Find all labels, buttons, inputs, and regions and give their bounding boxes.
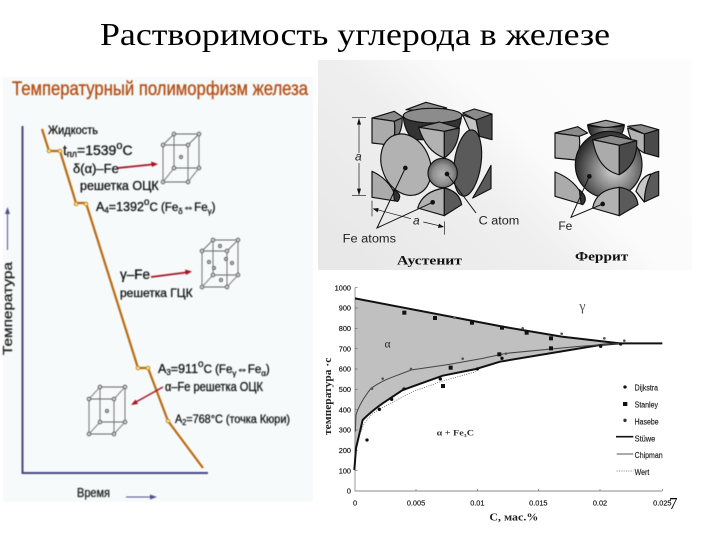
legend [616, 384, 663, 477]
region label: alpha + Fe3C: α + Fe₃C [437, 429, 474, 438]
x axis numbers: 0.02 [593, 498, 607, 507]
curve: Wert [361, 372, 476, 432]
curve labels: ⇔Fe [183, 202, 208, 214]
curve labels: C (Fe [149, 202, 178, 214]
austenite caption: Аустенит [397, 253, 463, 268]
legend: Chipman [635, 451, 663, 460]
legend: Hasebe [635, 417, 659, 426]
curve labels: o [116, 140, 122, 152]
time arrow [126, 494, 157, 500]
y axis numbers: 700 [339, 344, 351, 353]
alpha region [354, 298, 620, 470]
y axis numbers: 1000 [335, 283, 351, 292]
markers: Hasebe [371, 316, 626, 390]
title: Растворимость углерода в железе [100, 16, 610, 52]
curve labels: γ [232, 369, 236, 378]
markers: Stanley [402, 311, 553, 388]
panel: crystal lattices [318, 60, 692, 270]
lattice labels: Fe atoms [343, 231, 396, 245]
curve labels: α–Fe решетка ОЦК [165, 380, 264, 394]
curve labels: C (Fe [204, 364, 232, 376]
curve labels: ⇔Fe [236, 364, 261, 376]
curve labels: A [158, 362, 166, 376]
page number: 7 [669, 494, 678, 513]
legend: Wert [635, 468, 650, 477]
curve labels: α [261, 369, 266, 378]
red arrows [118, 162, 192, 405]
legend: Dijkstra [635, 384, 658, 393]
lattice labels: a [413, 214, 420, 228]
curve labels: =1392 [109, 200, 144, 214]
y axis numbers: 600 [339, 365, 351, 374]
lattice labels: a [355, 150, 362, 164]
y axis numbers: 400 [339, 405, 351, 414]
x axis numbers: 0.025 [653, 498, 672, 507]
markers: Dijkstra [365, 342, 622, 442]
legend: Stüwe [635, 434, 656, 443]
y axis numbers [335, 283, 351, 496]
curve labels: 2 [182, 418, 187, 427]
curve labels: решетка ГЦК [120, 286, 193, 300]
lattice labels: C atom [479, 214, 519, 228]
panel: temperature polymorphism of iron [1, 77, 313, 502]
curve labels: δ [178, 207, 183, 216]
curve labels: ) [212, 202, 216, 214]
curve labels [48, 125, 290, 427]
curve labels: γ [208, 207, 212, 216]
region label: gamma: γ [578, 299, 586, 314]
icon: FCC cube [200, 238, 240, 289]
curve labels: C [122, 142, 133, 158]
curve labels: 3 [166, 368, 171, 377]
curve labels: A [175, 412, 183, 426]
x axis numbers: 0.01 [470, 498, 484, 507]
curve labels: =911 [171, 362, 198, 376]
x axis title: С, мас.% [489, 512, 538, 524]
panel heading: Температурный полиморфизм железа [12, 79, 308, 100]
axes [22, 126, 208, 473]
icon: BCC cube bottom [87, 385, 127, 436]
curve labels: ) [266, 364, 270, 376]
x axis numbers: 0 [353, 498, 357, 507]
icon: BCC cube top [161, 132, 201, 184]
temperature arrow [5, 207, 10, 250]
ferrite lattice [555, 120, 659, 216]
y axis numbers: 0 [347, 487, 351, 496]
legend: Stanley [635, 401, 658, 410]
curve labels: 4 [104, 206, 109, 215]
y axis numbers: 200 [339, 446, 351, 455]
curve: Stuwe [354, 298, 662, 470]
curve labels: =1539 [77, 142, 117, 158]
austenite lattice [372, 102, 492, 216]
y axis label: Температура [1, 262, 15, 355]
curve labels: o [144, 197, 150, 208]
curve labels: решетка ОЦК [80, 179, 159, 193]
axes and ticks [355, 288, 662, 491]
curve labels: Жидкость [48, 125, 98, 137]
curve transition points [47, 149, 170, 423]
y axis numbers: 800 [339, 324, 351, 333]
curve labels: =768°C (точка Кюри) [186, 412, 290, 426]
y axis numbers: 100 [339, 466, 351, 475]
x axis label: Время [77, 486, 110, 500]
x axis numbers: 0.005 [407, 498, 425, 507]
curve labels: t [63, 142, 67, 158]
region label: alpha: α [385, 339, 391, 351]
x axis numbers: 0.015 [529, 498, 548, 507]
lattice labels: Fe [558, 219, 573, 233]
curve labels: o [198, 359, 204, 370]
y axis numbers: 900 [339, 304, 351, 313]
y axis numbers: 300 [339, 426, 351, 435]
cooling curve [42, 129, 203, 468]
y axis title: температура ·с [323, 357, 334, 435]
curve labels: A [96, 200, 104, 214]
ferrite caption: Феррит [575, 249, 629, 264]
x axis numbers [353, 498, 672, 507]
chart: solubility of carbon in ferrite [323, 283, 672, 524]
curve labels: δ(α)–Fe [73, 161, 119, 176]
lattice labels [343, 150, 573, 245]
curve: Chipman [355, 343, 620, 432]
lattice leader lines and dimension arrows [352, 117, 603, 235]
curve labels: пл [67, 149, 77, 159]
y axis numbers: 500 [339, 385, 351, 394]
curve labels: γ–Fe [120, 267, 150, 282]
